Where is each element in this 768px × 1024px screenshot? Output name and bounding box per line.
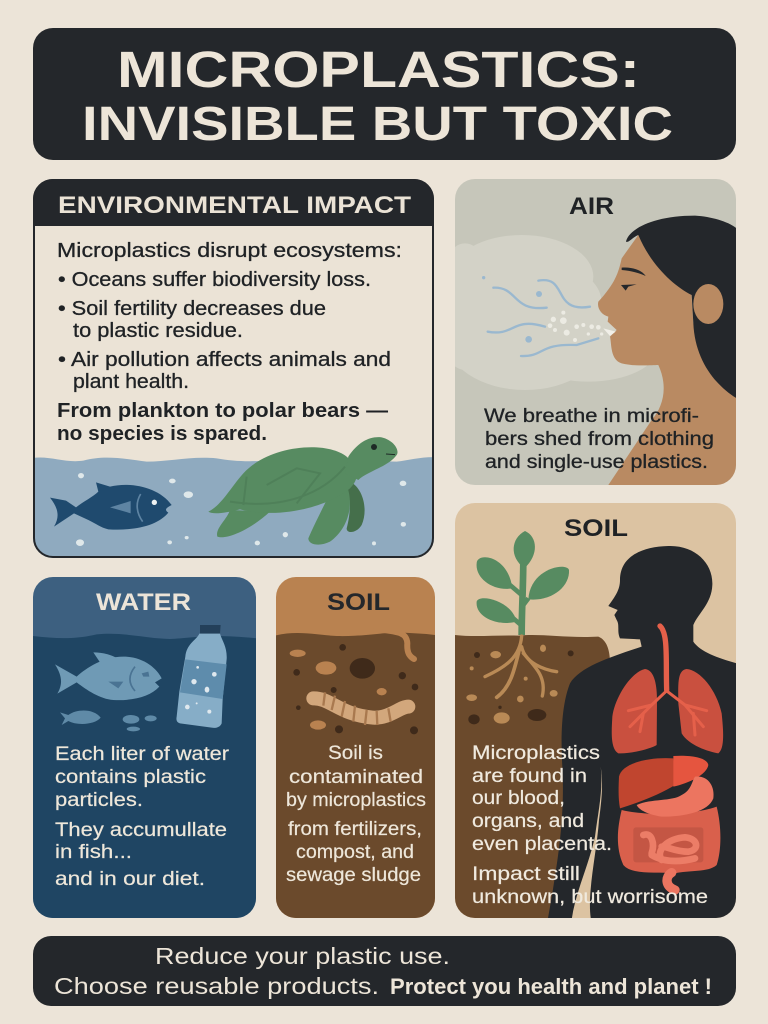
panel: body and soil <box>455 503 742 920</box>
illustration: person breathing in microfibers <box>435 216 737 485</box>
text block: microplastics in the body: unknown, but worrisome <box>472 887 708 908</box>
text block: microplastics in the body: are found in <box>472 766 587 787</box>
panel: environmental impact <box>30 179 440 565</box>
text block: water contamination: and in our diet. <box>55 869 205 890</box>
heading: air: AIR <box>569 193 614 220</box>
title banner <box>33 28 736 160</box>
text block: microplastics in the body: organs, and <box>472 811 584 832</box>
text block: soil contamination: sewage sludge <box>286 865 421 886</box>
illustration: sea with fish and turtle <box>30 437 440 565</box>
panel: soil <box>275 577 435 918</box>
text block: ecosystem effects <box>57 240 402 393</box>
text block: soil contamination: contaminated <box>289 767 423 788</box>
panel: water <box>30 577 257 918</box>
callout: no species spared: From plankton to polar bears — <box>57 400 388 422</box>
heading: soil: SOIL <box>327 589 390 616</box>
call to action banner: Protect you health and planet ! <box>390 974 712 999</box>
heading: water: WATER <box>96 589 191 616</box>
text block: soil contamination: Soil is <box>328 743 383 764</box>
text block: soil contamination <box>286 743 426 886</box>
illustration: soil with worm <box>275 629 435 918</box>
text block: water contamination: in fish... <box>55 842 132 863</box>
text block: microplastics in the body <box>472 743 708 908</box>
callout: no species spared <box>57 400 388 445</box>
text block: ecosystem effects: plant health. <box>73 371 189 393</box>
text block: soil contamination: from fertilizers, <box>288 819 422 840</box>
call to action banner <box>33 936 736 1006</box>
call to action banner: Choose reusable products. <box>54 973 379 999</box>
text block: soil contamination: compost, and <box>296 842 414 863</box>
call to action banner: Reduce your plastic use. <box>155 943 450 969</box>
text block: water contamination: They accumullate <box>55 820 227 841</box>
heading: environmental impact: ENVIRONMENTAL IMPACT <box>58 192 411 219</box>
text block: soil contamination: by microplastics <box>286 790 426 811</box>
illustration: plant in soil <box>455 531 610 920</box>
text block: microplastics in the body: even placenta. <box>472 834 612 855</box>
text block: microfibers: bers shed from clothing <box>485 429 714 450</box>
text block: microfibers: We breathe in microfi- <box>484 406 699 427</box>
text block: microplastics in the body: Microplastics <box>472 743 600 764</box>
text block: water contamination: contains plastic <box>55 767 206 788</box>
text block: ecosystem effects: to plastic residue. <box>73 320 243 342</box>
text block: water contamination <box>55 744 230 890</box>
text block: microfibers: and single-use plastics. <box>485 452 708 473</box>
text block: microplastics in the body: our blood, <box>472 788 565 809</box>
panel: air <box>435 179 737 485</box>
text block: ecosystem effects: • Soil fertility decreases due <box>58 298 326 320</box>
title banner: INVISIBLE BUT TOXIC <box>82 98 673 151</box>
text block: ecosystem effects: • Oceans suffer biodiversity loss. <box>58 269 371 291</box>
text block: ecosystem effects: Microplastics disrupt ecosystems: <box>57 240 402 262</box>
text block: water contamination: particles. <box>55 790 143 811</box>
text block: ecosystem effects: • Air pollution affects animals and <box>58 349 391 371</box>
illustration: fish and plastic bottle <box>30 625 257 918</box>
callout: no species spared: no species is spared. <box>57 423 267 445</box>
illustration: human silhouette with organs <box>548 546 742 920</box>
heading: soil: SOIL <box>564 515 628 542</box>
text block: microplastics in the body: Impact still <box>472 864 580 885</box>
text block: microfibers <box>484 406 714 473</box>
title banner: MICROPLASTICS: <box>117 41 640 98</box>
text block: water contamination: Each liter of water <box>55 744 230 765</box>
